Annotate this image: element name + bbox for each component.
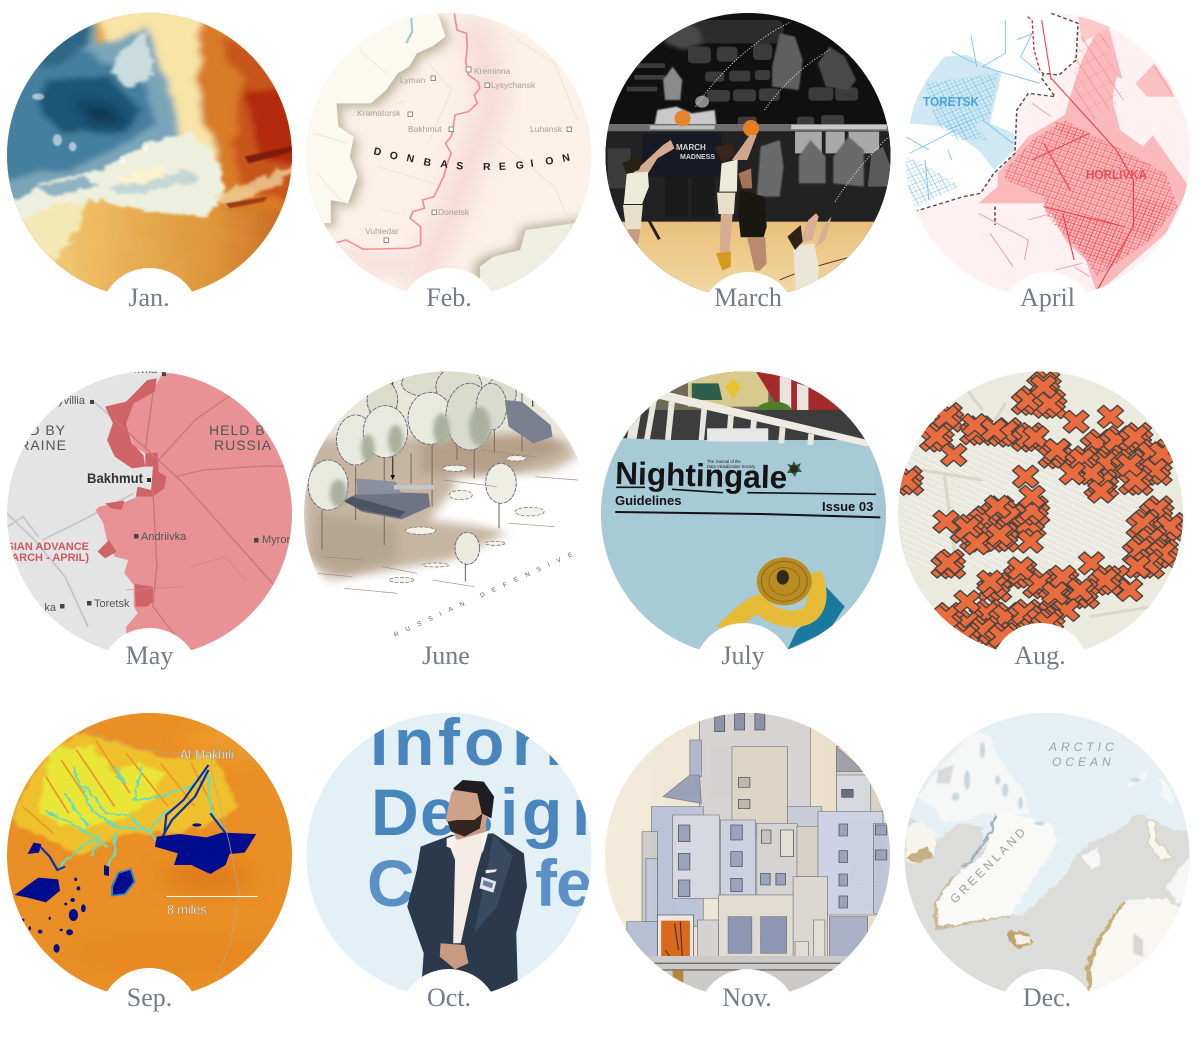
- month label: July: July: [721, 641, 765, 670]
- text: city labels: Lyman: [400, 75, 425, 85]
- text: map labels: Myronivka: [262, 534, 313, 546]
- text: Nightingale masthead: Nightingale: [615, 455, 788, 496]
- month label: Dec.: Dec.: [1023, 983, 1071, 1012]
- text: city labels: [357, 66, 572, 242]
- icon: Nightingale star: [787, 461, 802, 477]
- panel: March basketball photo: [606, 13, 890, 306]
- month label: Dec.: [997, 969, 1097, 1045]
- month label: March: March: [714, 283, 782, 312]
- text: MARCH MADNESS banner: [676, 144, 715, 159]
- month label: May: May: [126, 641, 173, 670]
- text: map labels: yvillia: [58, 395, 86, 407]
- month label: Nov.: [698, 969, 798, 1045]
- map: Bakhmut control areas: [7, 372, 292, 650]
- text: map labels: [10, 372, 290, 611]
- image: blue to red temperature field: [0, 0, 321, 313]
- text: city labels: Bakhmut: [408, 124, 442, 134]
- map: Arctic relief with Greenland: [898, 705, 1200, 1005]
- month label: Oct.: Oct.: [427, 983, 471, 1012]
- text: city labels: Vuhledar: [365, 226, 399, 236]
- month label: Jan.: Jan.: [128, 283, 170, 312]
- map: Donbas front line: [306, 13, 592, 292]
- panel: April Toretsk and Horlivka street map: [906, 13, 1190, 312]
- text: map labels: RUSSIA: [214, 437, 272, 453]
- text: city labels: Luhansk: [530, 124, 563, 134]
- illustration: building facade with orange door: [605, 713, 890, 992]
- panel: Feb. Donbas region map: [306, 13, 592, 306]
- panel: Oct. conference speaker photo: [306, 713, 592, 1006]
- text: ARCTIC OCEAN: ARCTIC: [1048, 740, 1118, 754]
- text: map labels: HELD BY: [209, 422, 276, 438]
- text: map labels: Toretsk: [94, 598, 130, 610]
- text: map labels: ka: [44, 602, 57, 614]
- panel: Jan. temperature map: [0, 0, 321, 368]
- text: city labels: Kreminna: [474, 66, 511, 76]
- text: Guidelines: Guidelines: [615, 493, 681, 508]
- photo: basketball shot sequence: [606, 13, 890, 292]
- text: MARCH MADNESS banner: MARCH: [676, 143, 706, 152]
- text: map labels: (MARCH - APRIL): [0, 552, 89, 564]
- panel: May Bakhmut map: [7, 372, 292, 670]
- month label: March: [700, 272, 796, 368]
- month label: July: [694, 623, 794, 723]
- panel: Dec. Arctic shaded relief map: [898, 705, 1200, 1045]
- text: Information Design Conference screen: [370, 717, 590, 906]
- month label: Aug.: [990, 623, 1090, 723]
- text: journal tagline: Data Visualization Society: [707, 464, 756, 469]
- text: HORLIVKA: HORLIVKA: [1086, 168, 1147, 182]
- month label: Aug.: Aug.: [1014, 641, 1066, 670]
- text: map labels: HELD BY: [0, 422, 66, 438]
- month label: April: [1000, 272, 1096, 368]
- map: orange X markers on street grid: [898, 372, 1183, 650]
- text: city labels: Kramatorsk: [357, 108, 401, 118]
- map: floodwater satellite image: [7, 713, 292, 992]
- text: TORETSK: TORETSK: [923, 95, 979, 109]
- photo: speaker in front of conference screen: [306, 713, 592, 992]
- month label: Nov.: Nov.: [722, 983, 772, 1012]
- text: Al Makhili: Al Makhili: [180, 748, 234, 762]
- month label: June: June: [422, 641, 470, 670]
- text: map labels: sorivka: [122, 364, 158, 376]
- text: Information Design Conference screen: Design: [371, 775, 612, 849]
- scale bar: 8 miles: [166, 896, 258, 917]
- illustration: tanks among trees: [304, 372, 579, 637]
- text: city labels: Lysychansk: [491, 80, 536, 90]
- text: MARCH MADNESS banner: MADNESS: [680, 154, 715, 161]
- text: Information Design Conference screen: Inform: [370, 705, 604, 779]
- month label: May: [100, 628, 200, 728]
- month label: Feb.: [399, 268, 499, 368]
- photo: Nightingale magazine and measuring tape: [601, 372, 886, 650]
- month label: April: April: [1020, 283, 1075, 312]
- month label: Oct.: [399, 969, 499, 1045]
- month label: Jan.: [100, 268, 200, 368]
- panel: July Nightingale journal photo: [601, 372, 886, 670]
- text: ARCTIC OCEAN: [1048, 740, 1118, 769]
- month label: Sep.: [100, 968, 200, 1045]
- scale bar: 8 miles: 8 miles: [167, 903, 207, 917]
- map: street network: [906, 13, 1190, 292]
- text: map labels: Andriivka: [141, 531, 187, 543]
- text: GREENLAND: GREENLAND: [947, 823, 1030, 906]
- month label: Sep.: Sep.: [127, 983, 172, 1012]
- month label: Feb.: Feb.: [426, 283, 472, 312]
- text: DONBAS REGION: DONBASREGION: [372, 145, 571, 173]
- text: RUSSIAN DEFENSIVE: RUSSIAN DEFENSIVE: [393, 548, 581, 639]
- text: ARCTIC OCEAN: OCEAN: [1052, 755, 1115, 769]
- panel: June illustrated battlefield: [304, 372, 579, 664]
- text: Issue 03: Issue 03: [822, 499, 873, 514]
- text: map labels: Bakhmut: [87, 470, 143, 486]
- text: city labels: Donetsk: [438, 207, 470, 217]
- panel: Sep. satellite flood map: [7, 713, 292, 1012]
- text: journal tagline: The Journal of the: [707, 459, 741, 464]
- panel: Aug. map with orange crosses: [898, 372, 1183, 670]
- month label: June: [398, 630, 494, 726]
- text: Information Design Conference screen: Confer: [367, 846, 618, 920]
- panel: Nov. illustrated building facade: [605, 713, 890, 1006]
